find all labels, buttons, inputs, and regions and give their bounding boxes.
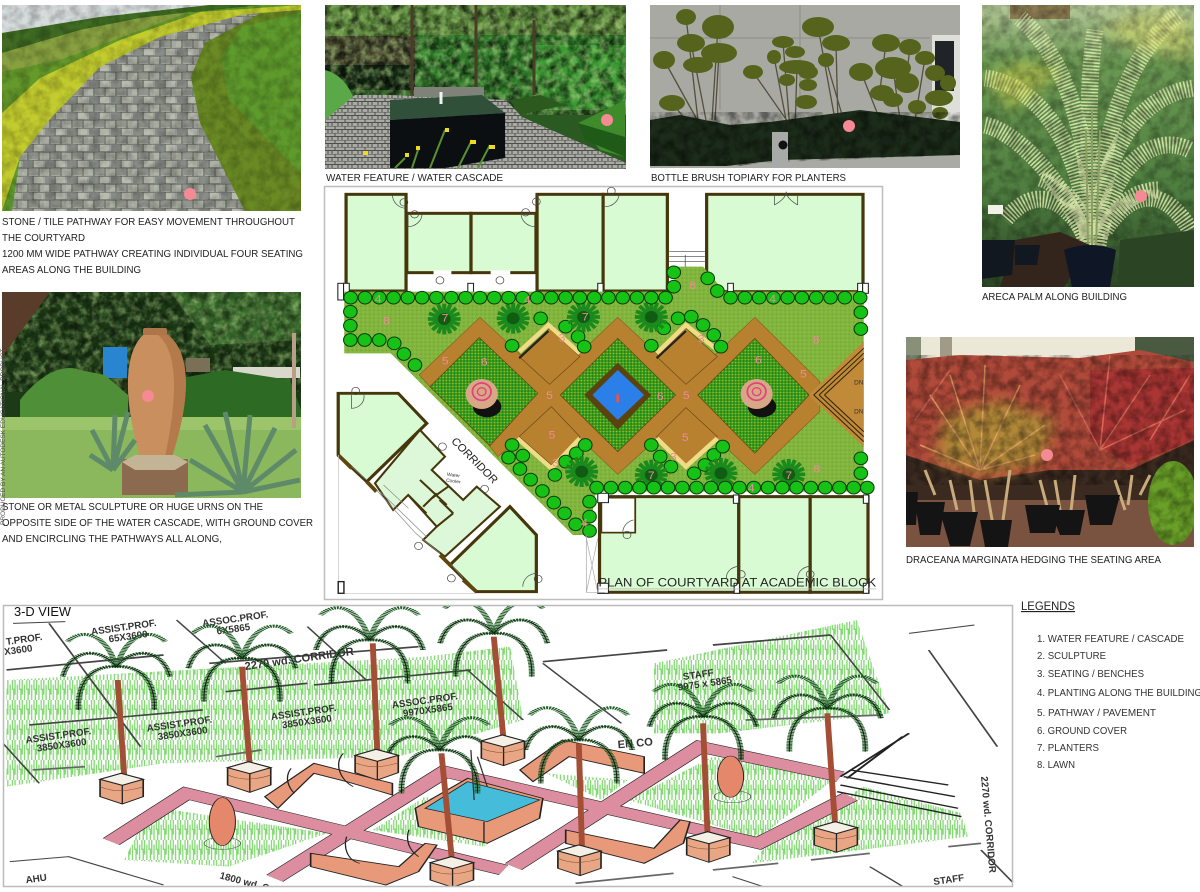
door symbols	[351, 187, 814, 587]
captions: 1200 MM WIDE PATHWAY CREATING INDIVIDUAL FOUR SEATING	[2, 248, 303, 260]
legend: 3. SEATING / BENCHES	[1037, 668, 1144, 680]
marker dot	[1135, 190, 1147, 202]
plan of courtyard	[338, 187, 877, 593]
sketch labels: ASSIST.PROF.	[90, 618, 157, 638]
star palms	[428, 302, 805, 490]
plan numbers: 4	[375, 293, 382, 305]
plan numbers: 7	[785, 469, 792, 482]
stairs: DN	[854, 408, 863, 415]
plan numbers: 6	[481, 356, 488, 369]
sketch labels: 2270 wd. CORRIDOR	[244, 646, 355, 673]
plan numbers: 3	[552, 457, 559, 470]
planter boxes	[100, 735, 857, 887]
captions: BOTTLE BRUSH TOPIARY FOR PLANTERS	[651, 172, 846, 184]
water cooler label: Cooler	[446, 478, 461, 485]
captions: ARECA PALM ALONG BUILDING	[982, 291, 1127, 303]
sketch labels: 65X3600	[108, 629, 149, 645]
sketch labels: X3600	[4, 643, 34, 658]
captions	[2, 172, 1161, 566]
urns	[204, 756, 751, 849]
window posts	[338, 283, 869, 593]
ground cover	[430, 338, 809, 453]
plan title: PLAN OF COURTYARD AT ACADEMIC BLOCK	[598, 575, 877, 589]
photo: bottle brush topiary	[650, 5, 960, 168]
plan numbers: 4	[769, 293, 777, 305]
sketch labels: ASSIST.PROF.	[270, 703, 337, 723]
frame edges	[586, 535, 876, 592]
plan numbers: 8	[383, 315, 390, 327]
plan numbers: 7	[582, 311, 589, 323]
corridor label: CORRIDOR	[448, 436, 500, 486]
floor plan lines	[0, 620, 1017, 888]
stairs	[808, 342, 864, 447]
plan numbers: 4	[748, 482, 755, 495]
marker dot	[601, 114, 613, 126]
urn right	[741, 379, 776, 417]
plan numbers: 5	[442, 355, 449, 367]
photo: terracotta urn	[0, 292, 301, 498]
plan numbers: 7	[648, 469, 655, 482]
sketch labels: AHU	[25, 872, 48, 886]
sketch labels: 3850X3600	[36, 737, 88, 755]
3-D view frame	[4, 606, 1012, 886]
photo: water feature	[325, 5, 626, 169]
plan numbers: 3	[559, 332, 566, 345]
captions: AND ENCIRCLING THE PATHWAYS ALL ALONG,	[2, 533, 222, 545]
legend: 8. LAWN	[1037, 759, 1075, 771]
sketch labels: 3850X3600	[281, 713, 333, 731]
sketch labels: T.PROF.	[5, 632, 43, 648]
sketch labels: 2270 wd. CORRIDOR	[978, 776, 997, 873]
sketch labels: ASSOC.PROF.	[391, 691, 459, 711]
plan numbers: 5	[546, 389, 553, 402]
plan numbers: 3	[698, 333, 705, 345]
rooms	[338, 194, 868, 593]
plan numbers: 5	[549, 429, 556, 441]
captions: OPPOSITE SIDE OF THE WATER CASCADE, WITH GROUND COVER	[2, 517, 313, 529]
stairs: DN	[854, 379, 863, 386]
sketch labels: 9975 x 5865	[677, 675, 733, 694]
hedge rows	[344, 266, 874, 537]
sketch labels: 9970X5865	[402, 702, 454, 720]
fountain	[415, 750, 543, 843]
legend: 7. PLANTERS	[1037, 742, 1099, 754]
seating	[265, 740, 690, 885]
captions: STONE OR METAL SCULPTURE OR HUGE URNS ON THE	[2, 501, 263, 513]
water cooler label: Water	[446, 473, 460, 479]
plan numbers	[375, 279, 821, 530]
pink pathways	[111, 747, 850, 878]
sketch labels: ASSIST.PROF.	[146, 715, 213, 735]
legend: 2. SCULPTURE	[1037, 650, 1106, 662]
marker dot	[843, 120, 855, 132]
plan numbers: 5	[682, 431, 689, 444]
legend: 5. PATHWAY / PAVEMENT	[1037, 707, 1157, 719]
pathway	[419, 317, 820, 474]
seating planters	[519, 328, 717, 465]
sketch labels: ASSOC.PROF.	[202, 610, 269, 630]
legend: 6. GROUND COVER	[1037, 725, 1127, 737]
seated figures	[287, 753, 419, 863]
plan numbers: 3	[670, 451, 677, 463]
plan numbers: 4	[524, 294, 531, 307]
plan numbers: 8	[814, 463, 821, 475]
sketch labels: 6X5865	[216, 622, 251, 638]
plan numbers: 5	[683, 389, 690, 402]
plan numbers: 6	[755, 354, 762, 366]
legend heading: LEGENDS	[1021, 601, 1075, 613]
photo: areca palm	[982, 5, 1194, 287]
sketch labels: STAFF	[933, 873, 965, 888]
sketch labels	[2, 609, 997, 892]
sketch labels: STAFF	[682, 668, 714, 683]
watermark: PRODUCED BY AN AUTODESK EDUCATIONAL PRODUCT	[0, 349, 7, 525]
plan numbers: 6	[657, 390, 664, 403]
captions: WATER FEATURE / WATER CASCADE	[326, 172, 503, 184]
marker dot	[184, 188, 196, 200]
sketch labels: 3850X3600	[157, 725, 209, 743]
plan numbers: 5	[800, 368, 807, 381]
photo: stone pathway	[0, 5, 301, 211]
panel: 3-D view	[0, 601, 1017, 892]
legend: 1. WATER FEATURE / CASCADE	[1037, 633, 1184, 645]
bench shadows	[519, 331, 686, 358]
captions: STONE / TILE PATHWAY FOR EASY MOVEMENT THROUGHOUT	[2, 216, 296, 228]
plan frame	[324, 186, 882, 600]
stair lines	[837, 733, 961, 817]
marker dot	[1041, 449, 1053, 461]
urn left	[466, 379, 501, 417]
3-D view title: 3-D VIEW	[14, 604, 72, 619]
photo: draceana marginata	[906, 337, 1198, 547]
plan numbers: 4	[581, 517, 588, 530]
sketch labels: ASSIST.PROF.	[25, 726, 92, 746]
captions: THE COURTYARD	[2, 232, 85, 244]
pool	[584, 363, 651, 430]
captions: AREAS ALONG THE BUILDING	[2, 264, 141, 276]
captions: DRACEANA MARGINATA HEDGING THE SEATING AREA	[906, 554, 1161, 566]
plan numbers: 8	[813, 334, 820, 347]
sketch labels: EN CO	[617, 736, 654, 751]
plan numbers: 7	[442, 312, 448, 325]
green hatching	[7, 620, 968, 867]
marker dot	[142, 390, 154, 402]
plan numbers: 8	[689, 279, 697, 292]
legend	[1021, 601, 1200, 771]
palm trunks and fronds	[63, 601, 881, 867]
lawn	[344, 267, 864, 535]
shrubs	[505, 310, 729, 481]
gold benches	[517, 325, 717, 468]
